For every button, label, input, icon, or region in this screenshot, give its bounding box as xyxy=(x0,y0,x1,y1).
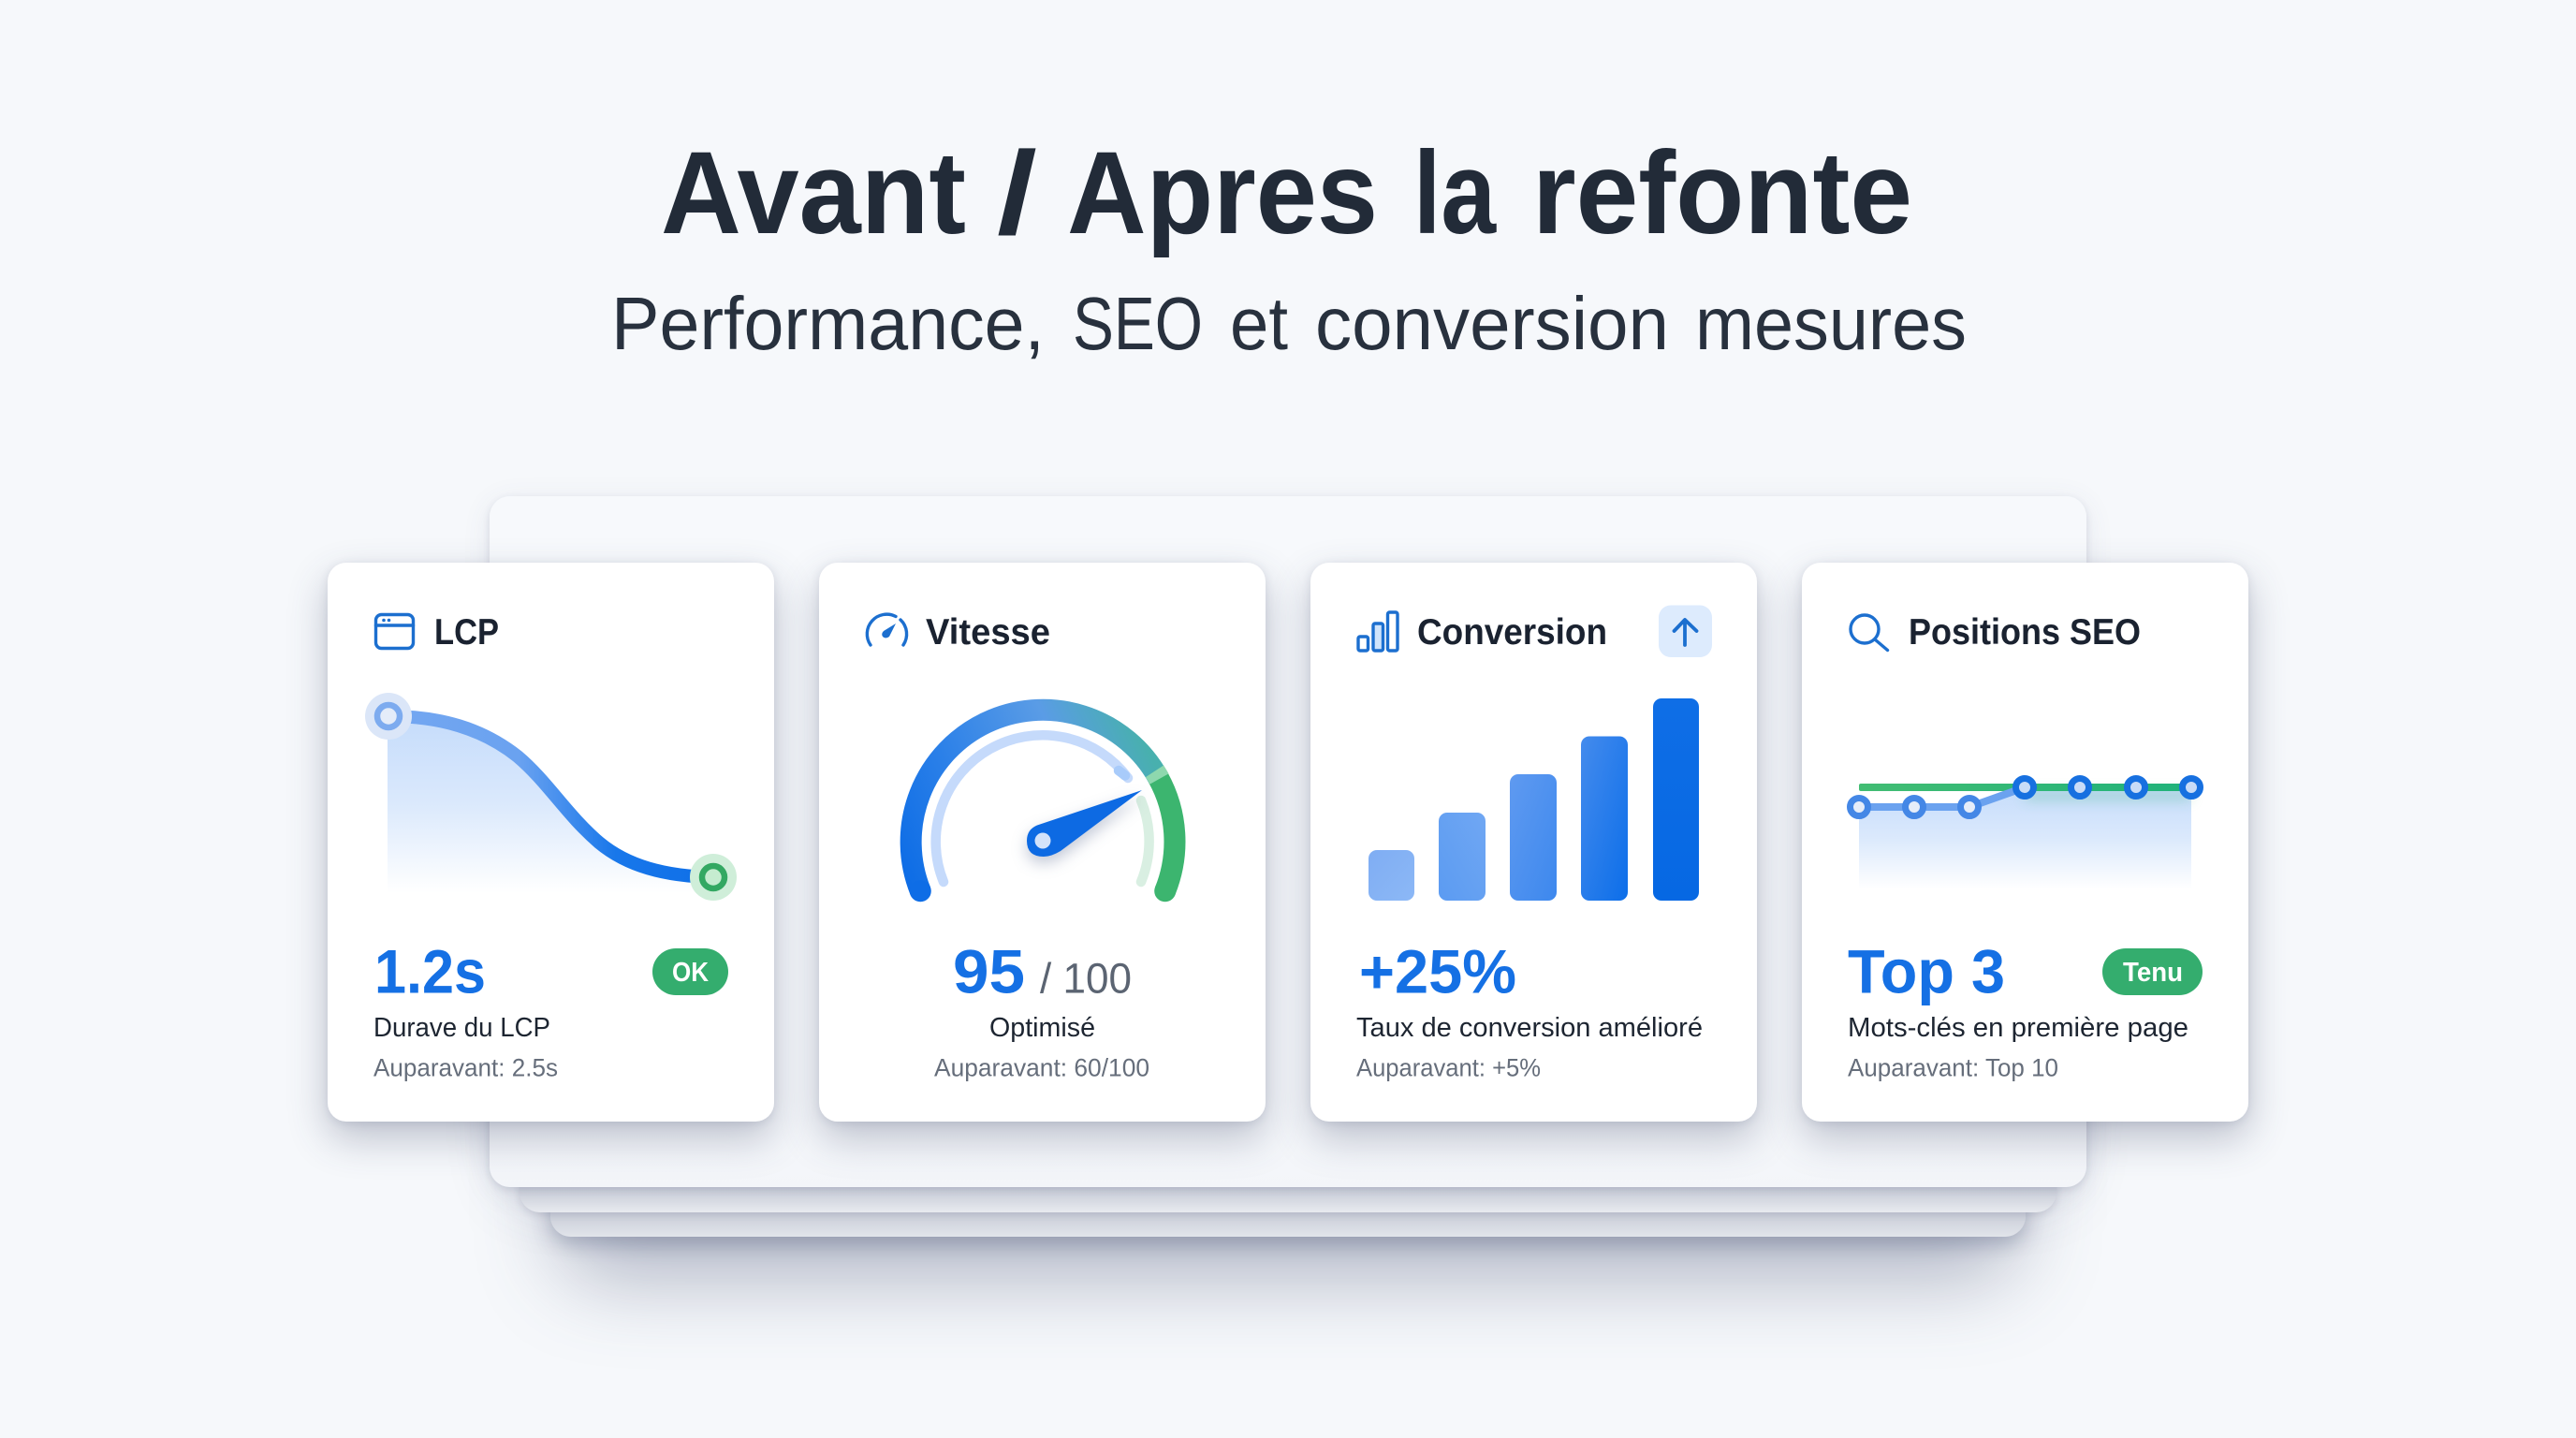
label: Optimisé: Optimisé xyxy=(989,1013,1095,1043)
subtitle: conversion xyxy=(1315,282,1669,365)
panel: stacked background sheet 3 xyxy=(550,843,2026,1237)
badge: up arrow xyxy=(1659,605,1712,657)
title: la xyxy=(1413,128,1497,258)
card: Conversion xyxy=(1310,563,1757,1122)
card: LCP xyxy=(328,563,774,1122)
badge: Tenu xyxy=(2102,948,2203,995)
previous value: Auparavant: Top 10 xyxy=(1848,1054,2058,1082)
label: Mots-clés en première page: Mots-clés en première page xyxy=(1848,1013,2188,1043)
subtitle: mesures xyxy=(1695,282,1967,365)
subtitle: et xyxy=(1230,282,1288,365)
badge: Tenu: Tenu xyxy=(2123,958,2183,988)
subtitle: Performance, xyxy=(611,282,1045,365)
card: Positions SEO xyxy=(1802,563,2248,1122)
title: refonte xyxy=(1532,128,1912,258)
ambient shadow under stack xyxy=(580,889,1996,1217)
panel: stacked background sheet 2 xyxy=(520,749,2056,1212)
title: Apres xyxy=(1067,128,1378,258)
value: Top 3: Top 3 xyxy=(1848,936,2005,1005)
line chart: LCP decreasing xyxy=(365,693,737,901)
title: / xyxy=(997,128,1037,258)
icon: magnifier xyxy=(1851,615,1887,650)
value: 1.2s: 1.2s xyxy=(374,936,486,1005)
panel: stacked background sheet 1 xyxy=(490,496,2086,1187)
value: +25%: +25% xyxy=(1359,936,1516,1005)
ambient shadow around main sheet xyxy=(524,712,2052,1161)
icon: speedometer xyxy=(867,614,907,645)
previous value: Auparavant: 2.5s xyxy=(373,1054,558,1082)
badge: OK xyxy=(652,948,728,995)
label: Durave du LCP: Durave du LCP xyxy=(373,1013,550,1043)
previous value: Auparavant: 60/100 xyxy=(934,1054,1149,1082)
icon: bar signal xyxy=(1358,612,1398,651)
heading: LCP: LCP xyxy=(434,612,499,653)
value: 95 / 100 xyxy=(953,936,1132,1005)
label: Taux de conversion amélioré: Taux de conversion amélioré xyxy=(1356,1013,1703,1043)
heading: Positions SEO: Positions SEO xyxy=(1909,612,2141,653)
subtitle: SEO xyxy=(1073,282,1203,365)
value: 95 / 100: / 100 xyxy=(1040,955,1132,1002)
heading: Vitesse: Vitesse xyxy=(926,612,1050,653)
subtitle xyxy=(611,282,1967,365)
card: Vitesse xyxy=(819,563,1266,1122)
value: 95 / 100: 95 xyxy=(953,936,1025,1005)
previous value: Auparavant: +5% xyxy=(1356,1054,1541,1082)
gauge chart xyxy=(910,710,1176,902)
heading: Conversion: Conversion xyxy=(1417,612,1607,653)
icon: browser window xyxy=(376,614,414,648)
title: Avant xyxy=(661,128,966,258)
bar chart xyxy=(1368,698,1699,901)
line chart: SEO positions xyxy=(1850,779,2200,889)
title xyxy=(661,128,1912,258)
badge: OK: OK xyxy=(672,958,709,988)
